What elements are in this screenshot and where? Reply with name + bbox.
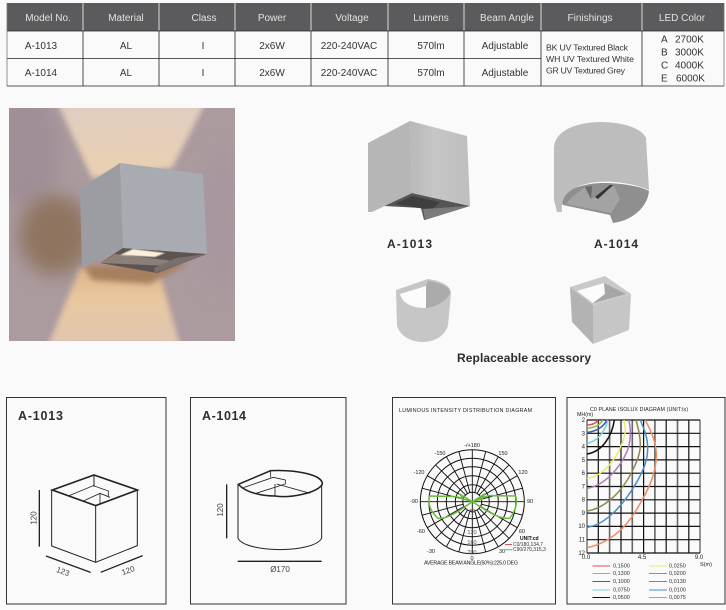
isolux axis labels: 3 — [582, 432, 586, 438]
table row A-1013: I — [202, 41, 204, 52]
label: replaceable accessory: Replaceable accessory — [457, 351, 591, 365]
finishings list: GR UV Textured Grey — [546, 66, 626, 76]
table row A-1014 — [25, 68, 529, 79]
polar angle labels: 160 — [467, 540, 477, 546]
dimension labels: Ø170 — [270, 565, 290, 574]
table row A-1014: A-1014 — [25, 68, 58, 79]
table row A-1014: I — [202, 68, 204, 79]
dimension labels — [216, 503, 290, 574]
dimension labels: 120 — [216, 503, 225, 517]
isolux axis labels — [578, 418, 586, 557]
table header row: Power — [258, 13, 287, 24]
half-round line drawing — [227, 470, 322, 561]
polar angle labels: 150 — [498, 451, 508, 457]
table header row: Finishings — [567, 13, 613, 24]
LED colour list: 4000K — [675, 60, 704, 72]
isolux axis labels: 11 — [579, 538, 586, 544]
replaceable square cover — [570, 276, 631, 344]
product render A-1014 — [554, 122, 649, 223]
finishings list — [546, 42, 634, 76]
lamp body — [80, 163, 207, 273]
specification table — [7, 3, 724, 86]
table header row: Model No. — [25, 13, 71, 24]
table row A-1013: AL — [120, 41, 133, 52]
isolux axis labels: 2 — [582, 418, 586, 424]
dimension labels — [30, 511, 136, 578]
isolux legend: 0,0200 — [669, 571, 686, 577]
LED colour list: A — [661, 34, 668, 46]
panel: C0 plane isolux diagram: 0.0 — [582, 555, 591, 561]
polar angle labels: 60 — [519, 529, 525, 535]
replaceable round cover — [396, 279, 451, 342]
polar legend: C90/270,315,3 — [513, 547, 546, 553]
beam angle caption: AVERAGE BEAM ANGLE(50%):225,0 DEG — [424, 560, 518, 566]
table row A-1014: AL — [120, 68, 133, 79]
polar legend — [505, 536, 546, 553]
LED colour list: 2700K — [675, 34, 704, 46]
panel: C0 plane isolux diagram: 9.0 — [695, 555, 704, 561]
polar legend: UNIT:cd — [520, 536, 539, 542]
table header row: Class — [191, 13, 217, 24]
polar angle labels: 40 — [469, 509, 475, 515]
lower light cone — [48, 268, 180, 345]
panel: C0 plane isolux diagram: MH(m) — [577, 412, 593, 418]
heading A-1013: A-1013 — [18, 409, 63, 423]
heading A-1014: A-1014 — [202, 409, 246, 423]
table header row: Lumens — [413, 13, 449, 24]
table row A-1013: 2x6W — [259, 41, 285, 52]
isolux axis labels: 7 — [582, 484, 586, 490]
isolux axis labels: 8 — [582, 498, 586, 504]
isolux legend: 0,0750 — [613, 588, 630, 594]
green distribution curve — [429, 494, 516, 518]
dimension labels: 123 — [55, 565, 71, 578]
isolux axis labels: 4 — [582, 444, 586, 450]
table header row: Material — [108, 13, 144, 24]
polar angle labels: 200 — [467, 550, 477, 556]
polar angle labels: -150 — [434, 451, 446, 457]
polar angle labels: 120 — [467, 530, 477, 536]
isolux legend: 0,1300 — [613, 571, 630, 577]
polar angle labels — [410, 443, 533, 562]
diagram title: LUMINOUS INTENSITY DISTRIBUTION DIAGRAM — [399, 408, 532, 414]
table row A-1014: Adjustable — [482, 68, 529, 79]
finishings list: BK UV Textured Black — [546, 42, 629, 52]
polar angle labels: 0 — [470, 556, 474, 562]
table row A-1014: 2x6W — [259, 68, 285, 79]
isolux legend: 0,0250 — [669, 564, 686, 570]
polar legend: C0/180,134,7 — [513, 542, 543, 548]
dimension labels: 120 — [120, 564, 136, 577]
isolux axis labels: 6 — [582, 471, 586, 477]
isolux legend: 0,1500 — [613, 564, 630, 570]
panel: C0 plane isolux diagram: 4.5 — [638, 555, 647, 561]
upper light cone — [56, 100, 207, 178]
table row A-1013: 220-240VAC — [321, 41, 377, 52]
LED colour list: E — [661, 74, 668, 84]
table header row: Beam Angle — [480, 13, 534, 24]
wall shadow — [19, 195, 91, 275]
polar angle labels: -120 — [413, 470, 425, 476]
isolux legend: 0,0130 — [669, 579, 686, 585]
label A-1013: A-1013 — [387, 237, 432, 251]
polar angle labels: -60 — [417, 529, 425, 535]
LED colour list: C — [661, 60, 668, 72]
label A-1014: A-1014 — [594, 237, 638, 251]
polar chart — [420, 450, 524, 554]
table row A-1013: A-1013 — [25, 41, 58, 52]
polar angle labels: 30 — [499, 549, 505, 555]
isolux legend: 0,0075 — [669, 595, 686, 601]
finishings list: WH UV Textured White — [546, 54, 634, 64]
LED colour list: 6000K — [676, 74, 705, 84]
polar angle labels: 120 — [518, 470, 528, 476]
isolux legend: 0,0100 — [669, 588, 686, 594]
table row A-1013 — [25, 41, 529, 52]
panel: A-1014 dimensions — [190, 398, 346, 604]
polar angle labels: -30 — [427, 549, 435, 555]
table header row: Voltage — [335, 13, 369, 24]
table header row: LED Color — [659, 13, 706, 24]
product render A-1013 — [368, 121, 470, 220]
table header row — [25, 13, 706, 24]
dimension labels: 120 — [30, 511, 38, 525]
panel: C0 plane isolux diagram — [567, 398, 725, 604]
isolux axis labels: 9 — [582, 511, 586, 517]
isolux legend: 0,0500 — [613, 595, 630, 601]
isolux axis labels: 12 — [578, 551, 586, 557]
isolux grid — [587, 420, 700, 553]
panel: C0 plane isolux diagram: S(m) — [700, 562, 712, 568]
isolux legend: 0,1000 — [613, 579, 630, 585]
polar angle labels: -90 — [410, 499, 418, 505]
isolux title: C0 PLANE ISOLUX DIAGRAM (UNIT:lx) — [590, 407, 688, 413]
table row A-1013: Adjustable — [482, 41, 529, 52]
table row A-1014: 220-240VAC — [321, 68, 377, 79]
polar angle labels: 90 — [527, 499, 533, 505]
cube line drawing — [39, 475, 143, 572]
LED colour list: B — [661, 48, 668, 58]
panel: A-1013 dimensions — [6, 398, 166, 604]
LED colour list — [661, 34, 705, 84]
LED colour list: 3000K — [675, 48, 704, 58]
isolux axis labels: 5 — [582, 458, 586, 464]
polar angle labels: -/+180 — [464, 443, 480, 449]
isolux curves — [587, 420, 656, 548]
panel: luminous intensity distribution diagram — [392, 398, 556, 604]
table row A-1014: 570lm — [417, 68, 445, 79]
table row A-1013: 570lm — [417, 41, 445, 52]
product photo: lit wall lamp — [9, 108, 235, 341]
isolux legend — [592, 564, 686, 601]
isolux axis labels: 10 — [578, 524, 586, 530]
